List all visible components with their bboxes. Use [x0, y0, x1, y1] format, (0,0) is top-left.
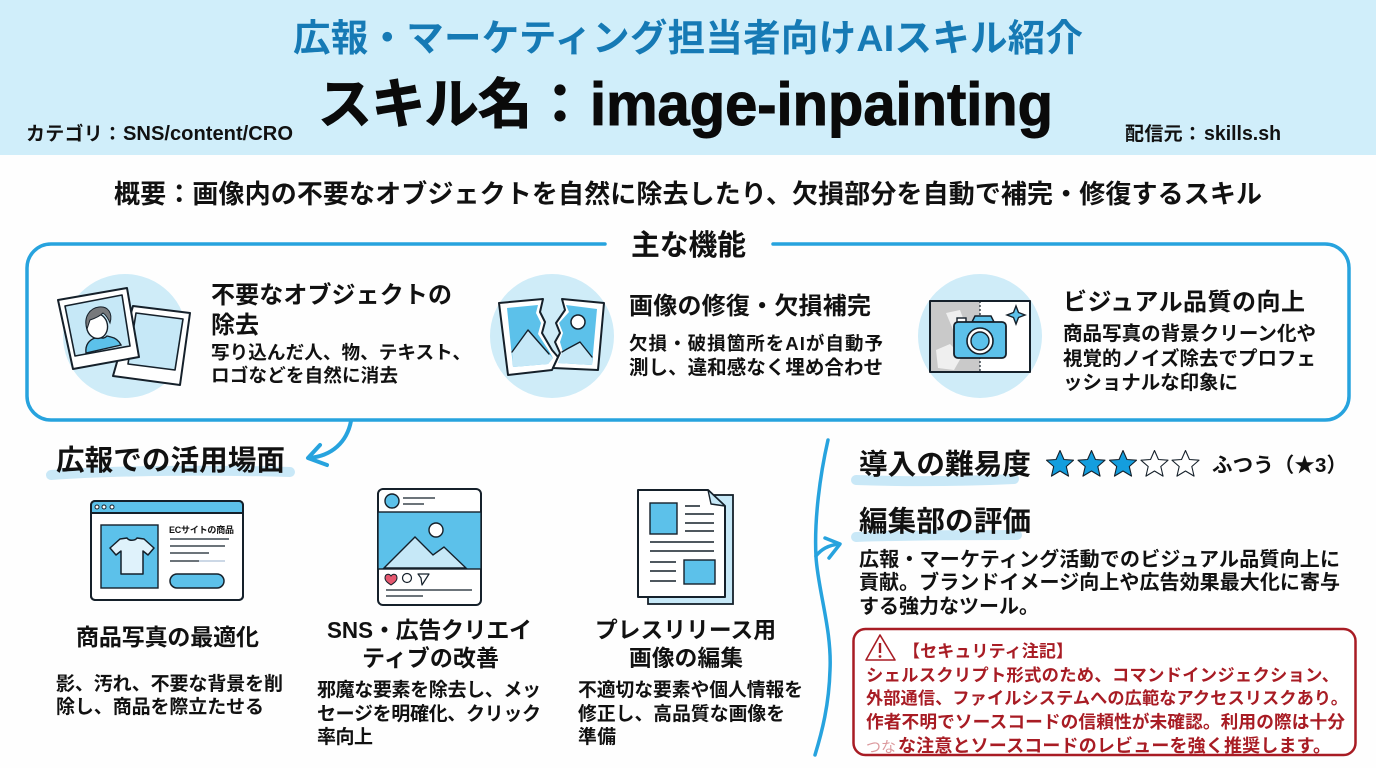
- use case title: ・広告クリエイ: [373, 617, 532, 643]
- heading with highlight: 編集部の評価: [859, 506, 1031, 538]
- callout body: 外部通信、ファイルシステムへの広範なアクセスリスクあり。: [866, 688, 1348, 708]
- callout body: つな: [866, 739, 896, 756]
- skill name: image-inpainting: [590, 71, 1053, 138]
- use case title: 画像の編集: [629, 645, 743, 671]
- use case description: 影、汚れ、不要な背景を削: [56, 673, 283, 695]
- distributor: 配信元：: [1125, 123, 1202, 145]
- feature title: ビジュアル品質の向上: [1063, 289, 1305, 316]
- skill name: ：: [533, 75, 587, 135]
- heading with highlight: 導入の難易度: [859, 449, 1031, 481]
- use case title: [327, 617, 532, 671]
- callout body: [866, 665, 1348, 756]
- feature: object removal: ロゴなどを自然に消去: [211, 365, 398, 386]
- evaluation text: する強力なツール。: [859, 595, 1039, 618]
- callout body: な注意とソースコードのレビューを強く推奨します。: [898, 735, 1331, 756]
- feature description: 商品写真の背景クリーン化や: [1063, 323, 1316, 345]
- icon: overlapping photos: [58, 274, 190, 398]
- difficulty label: ふつう（★3）: [1212, 454, 1347, 477]
- feature title: 画像の修復・欠損補完: [629, 292, 871, 320]
- feature description: 写り込んだ人、物、テキスト、: [211, 342, 471, 363]
- use case title: プレスリリース用: [595, 617, 776, 643]
- use case title: [595, 617, 776, 671]
- use case: SNS creative: 率向上: [317, 726, 373, 748]
- use case: product photo: 除し、商品を際立たせる: [56, 696, 264, 718]
- feature: image repair: [490, 274, 883, 398]
- icon: e-commerce browser window: [91, 501, 243, 600]
- use case title: ティブの改善: [362, 645, 499, 671]
- icon: warning triangle: [866, 635, 895, 660]
- feature: visual quality: 視覚的ノイズ除去でプロフェ: [1063, 347, 1316, 370]
- callout body: 作者不明でソースコードの信頼性が未確認。利用の際は十分: [866, 711, 1345, 732]
- use case title: 商品写真の最適化: [76, 624, 259, 650]
- section: editorial evaluation: [856, 506, 1340, 618]
- feature: object removal: 除去: [211, 312, 259, 339]
- use case description: 邪魔な要素を除去し、メッ: [317, 679, 541, 701]
- callout body: シェルスクリプト形式のため、コマンドインジェクション、: [866, 665, 1339, 685]
- evaluation text: [859, 547, 1340, 618]
- panel heading: 主な機能: [631, 230, 746, 262]
- icon: social post: [378, 489, 481, 605]
- use case: SNS creative: [317, 489, 541, 748]
- icon: torn photo: [490, 274, 614, 398]
- use case: press release: 準備: [578, 726, 616, 747]
- use case: SNS creative: セージを明確化、クリック: [317, 703, 541, 725]
- feature: image repair: 測し、違和感なく埋め合わせ: [629, 356, 883, 379]
- icon: star rating 3 of 5: [1046, 450, 1199, 476]
- feature: visual quality: [918, 274, 1316, 398]
- heading with highlight: 広報での活用場面: [56, 445, 285, 477]
- skill name: スキル名: [318, 75, 532, 135]
- feature description: 欠損・破損箇所をAIが自動予: [629, 333, 883, 354]
- evaluation text: 広報・マーケティング活動でのビジュアル品質向上に: [859, 547, 1340, 571]
- series title: 広報・マーケティング担当者向けAIスキル紹介: [293, 17, 1083, 59]
- use case title: SNS: [327, 617, 373, 643]
- icon: e-commerce browser window: ECサイトの商品: [169, 524, 234, 535]
- distributor: skills.sh: [1204, 123, 1281, 145]
- category: SNS/content/CRO: [123, 123, 293, 145]
- overview sentence: 概要：画像内の不要なオブジェクトを自然に除去したり、欠損部分を自動で補完・修復するスキル: [114, 179, 1262, 209]
- use case: product photo: [56, 501, 283, 718]
- use case: press release: [578, 490, 803, 747]
- distributor: [1125, 123, 1281, 145]
- arrow: column divider with pointer: [815, 440, 840, 755]
- arrow: panel to usage section: [308, 421, 351, 465]
- use case description: 不適切な要素や個人情報を: [578, 679, 803, 700]
- category: カテゴリ：: [26, 122, 122, 145]
- feature: visual quality: ッショナルな印象に: [1063, 372, 1238, 394]
- icon: press document: [638, 490, 733, 604]
- callout: security note: [854, 629, 1356, 756]
- skill name: [318, 71, 1053, 138]
- evaluation text: 貢献。ブランドイメージ向上や広告効果最大化に寄与: [859, 570, 1340, 594]
- callout heading: 【セキュリティ注記】: [903, 642, 1073, 661]
- header band: [0, 0, 1376, 155]
- feature: object removal: [58, 274, 471, 398]
- category: [26, 122, 293, 145]
- feature title: 不要なオブジェクトの: [211, 281, 452, 309]
- section: PR usage: [51, 445, 803, 748]
- icon: camera over cleaned background: [918, 274, 1042, 398]
- section: difficulty: [856, 449, 1347, 481]
- panel: main features: [27, 230, 1349, 420]
- use case: press release: 修正し、高品質な画像を: [578, 703, 785, 724]
